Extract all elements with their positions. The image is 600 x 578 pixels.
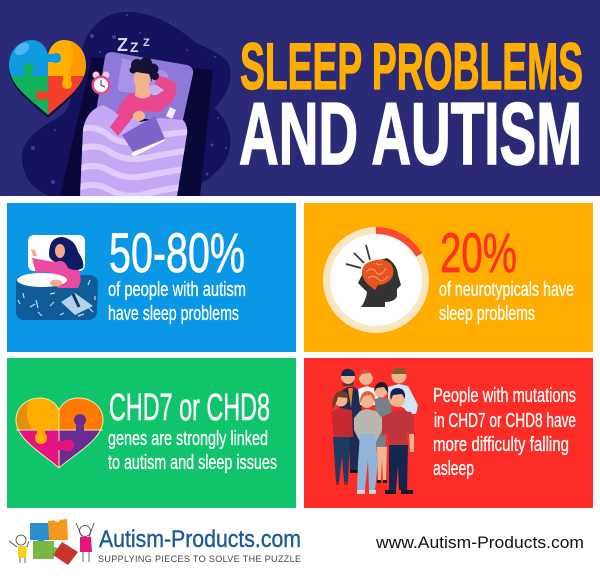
panel: blue statistic [7, 203, 296, 352]
sleep letters: Z [143, 37, 150, 49]
alarm clock [92, 72, 110, 94]
middle woman with dark hair [374, 382, 392, 483]
bed shadow [60, 57, 213, 196]
book [122, 116, 165, 152]
front middle woman [354, 391, 382, 494]
text: mutations: asleep [433, 458, 474, 480]
text: genes linked: genes are strongly linked [108, 428, 268, 450]
stars [31, 14, 227, 184]
icon: woman hugging pillow [16, 235, 98, 320]
website url: www.Autism-Products.com [375, 534, 584, 552]
icon: logo child left [9, 535, 29, 563]
torso and arm [110, 92, 166, 136]
text: people with autism: have sleep problems [108, 303, 239, 325]
hand [133, 111, 145, 121]
raised arm [150, 76, 176, 112]
stat: 50-80%: 50-80% [109, 221, 245, 284]
icon: brain [362, 260, 394, 290]
text: people with autism [108, 279, 246, 325]
stat: 20%: 20% [440, 221, 517, 284]
text: genes linked: to autism and sleep issues [108, 452, 277, 474]
sleep letters [117, 35, 150, 55]
night sky blob [22, 12, 231, 196]
text: mutations [433, 385, 576, 480]
icon: head silhouette [358, 258, 401, 307]
sleep letters: Z [117, 35, 128, 55]
header illustration: man awake in bed [22, 12, 231, 196]
logo tagline: SUPPLYING PIECES TO SOLVE THE PUZZLE [98, 554, 301, 564]
icon: group of people [331, 368, 418, 494]
text: neurotypicals [439, 279, 574, 325]
mattress [96, 52, 193, 124]
arm resting on blanket [110, 100, 142, 136]
front left woman [331, 391, 353, 485]
title [239, 29, 583, 183]
back left man [339, 369, 362, 473]
panel: green statistic [7, 358, 296, 508]
icon: purple and orange puzzle heart [16, 398, 104, 469]
icon: logo child right [76, 523, 94, 562]
header background [0, 0, 600, 196]
icon: logo puzzle pieces [30, 516, 78, 565]
phone [166, 107, 176, 119]
panel: red statistic [304, 358, 593, 508]
front right man [382, 388, 414, 494]
man [110, 57, 176, 136]
back middle woman [358, 370, 380, 405]
sleep letters: Z [130, 39, 139, 55]
text: people with autism: of people with autism [108, 279, 246, 301]
stat: CHD7 or CHD8: CHD7 or CHD8 [109, 387, 270, 429]
curly hair [130, 57, 159, 82]
icon: arrows to brain [346, 245, 370, 268]
blanket [80, 105, 187, 196]
chart: 20 percent ring with head icon [326, 230, 426, 330]
icon: puzzle heart [9, 40, 86, 118]
text: neurotypicals: sleep problems [439, 303, 535, 325]
face [134, 68, 150, 90]
footer logo [9, 516, 301, 565]
logo name: Autism-Products.com [99, 526, 301, 553]
panel: orange statistic [304, 203, 593, 352]
pillow [118, 58, 168, 95]
back right man [388, 368, 418, 414]
text: genes linked [108, 428, 277, 474]
neck [135, 84, 150, 98]
